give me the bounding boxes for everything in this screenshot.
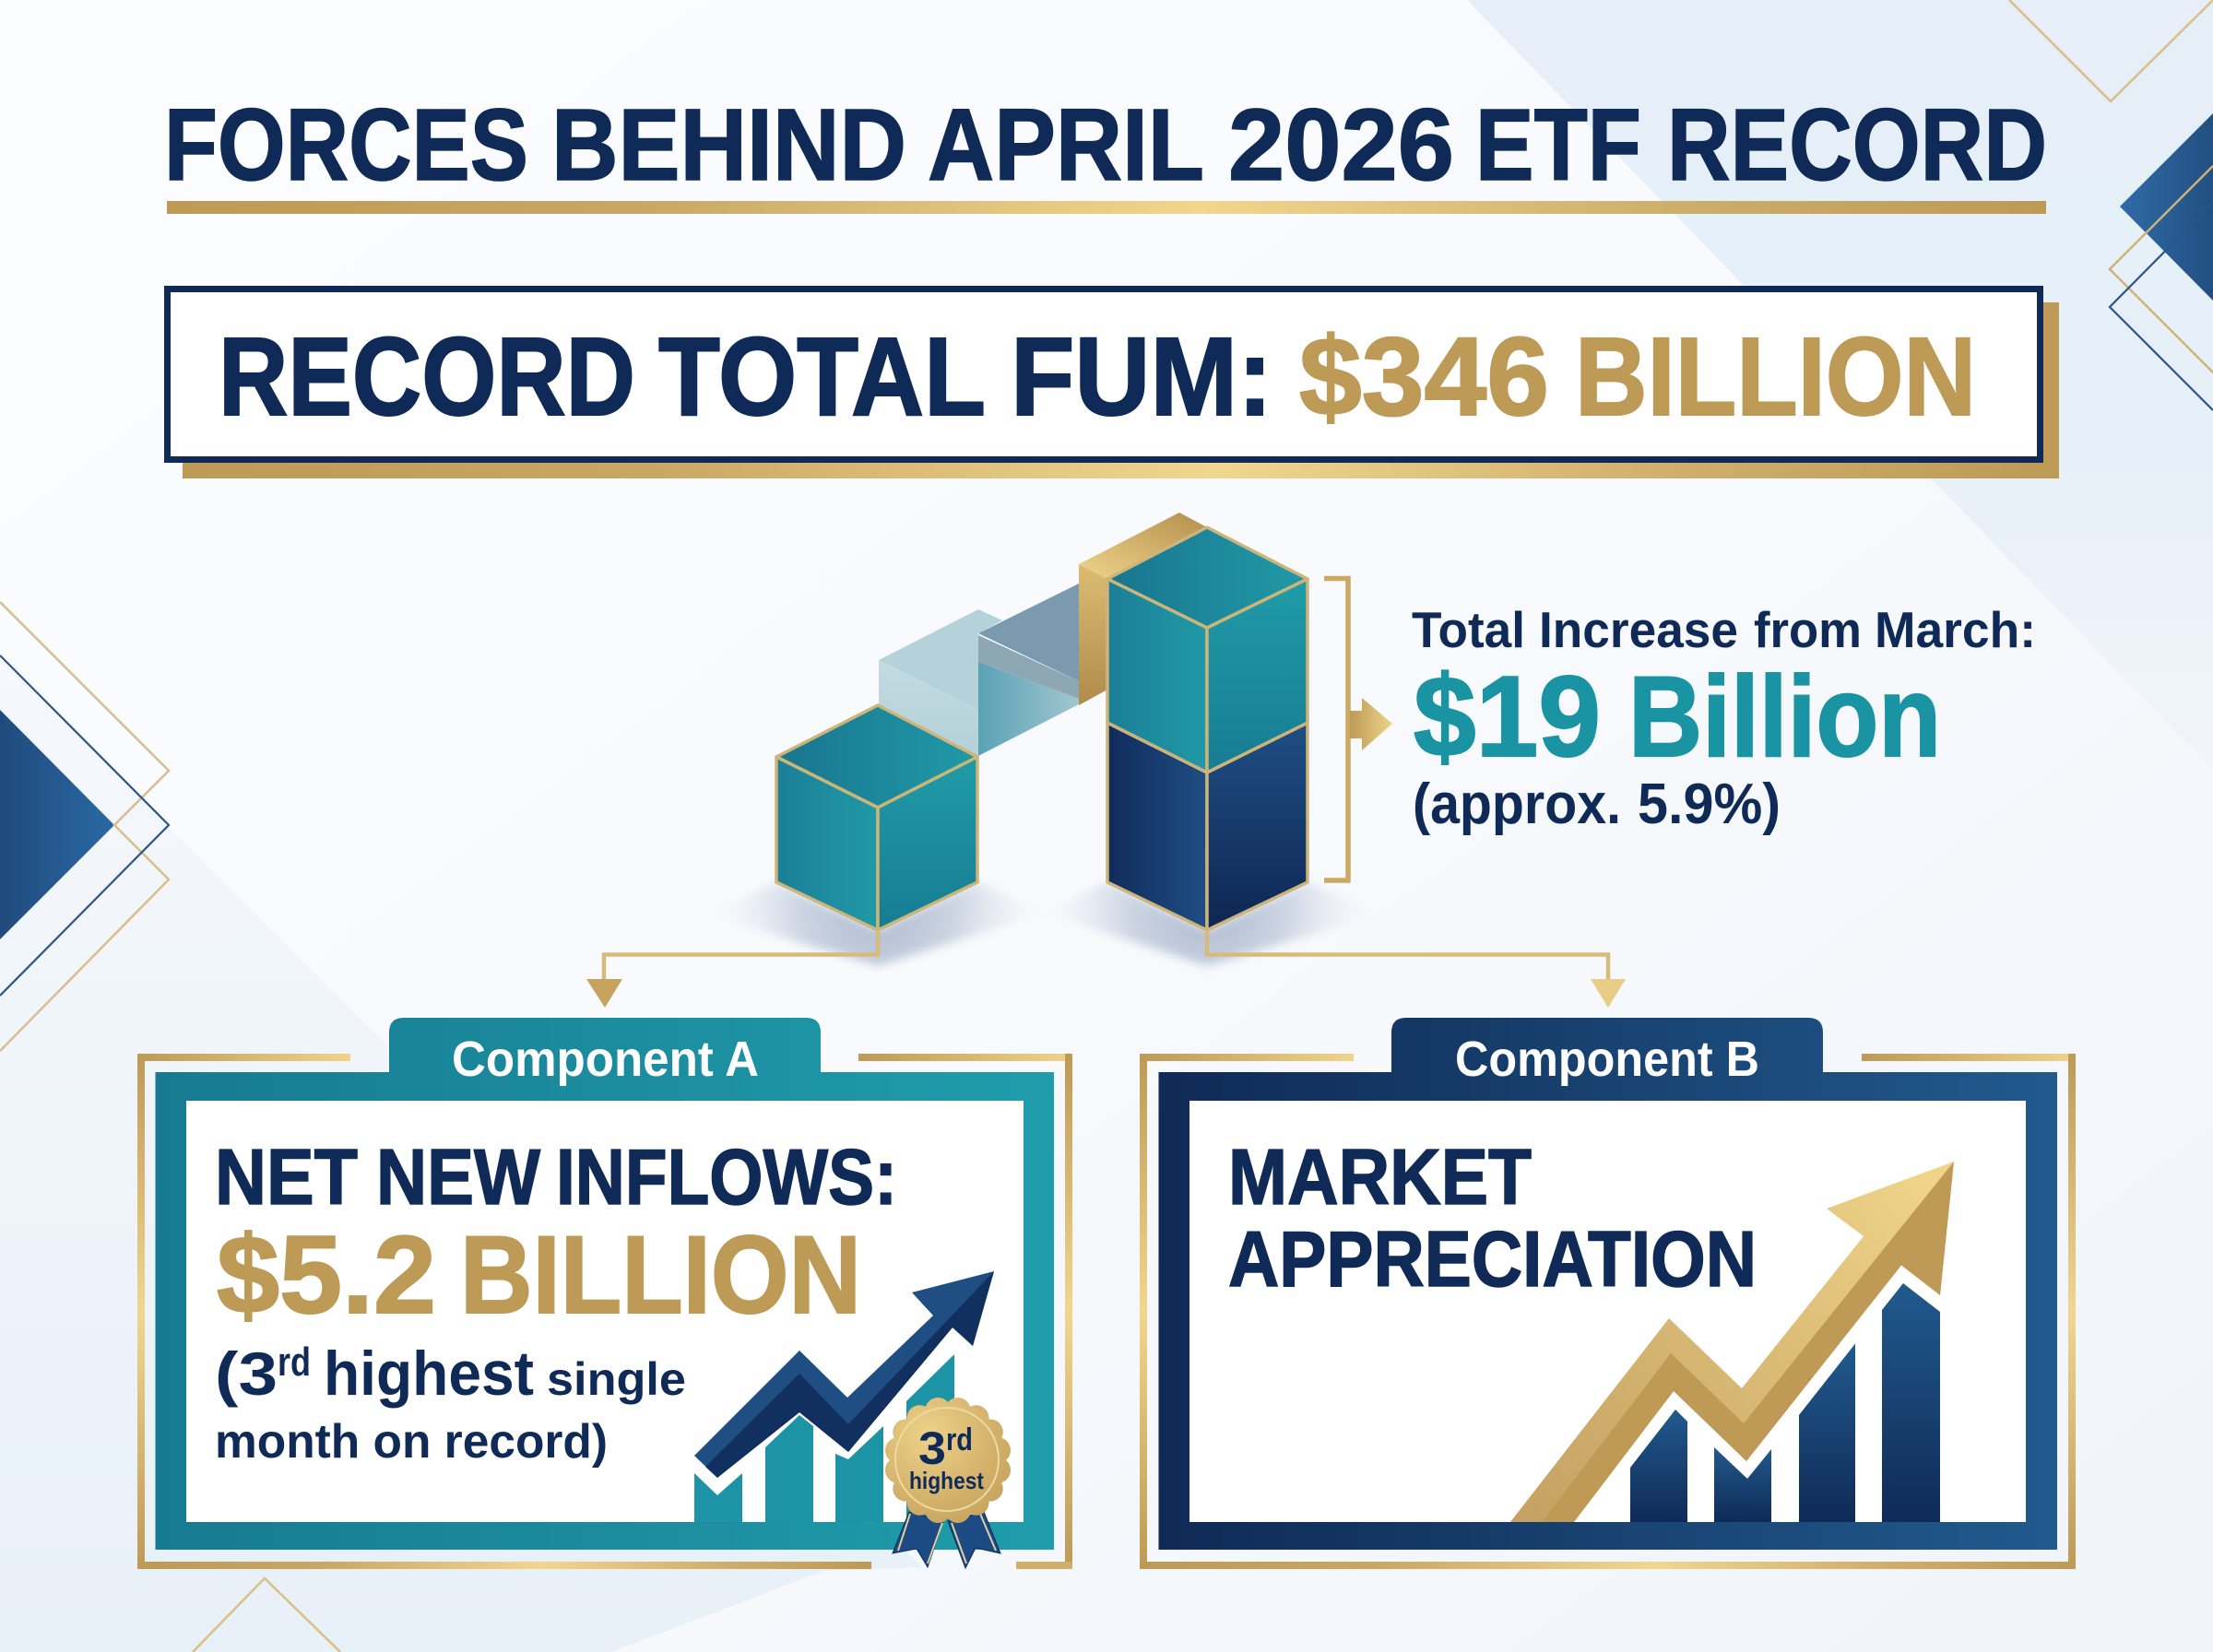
banner text: record total FUM (219, 313, 1272, 439)
note: 3rd highest single month on record: highest (324, 1339, 534, 1409)
banner value: $346 billion: BILLION (1575, 313, 1976, 439)
total increase label: March: (1875, 601, 2036, 658)
note: 3rd highest single month on record: rd (278, 1339, 311, 1385)
tab label A: Component A (452, 1032, 759, 1087)
chart: navy rising arrow (694, 1271, 994, 1478)
heading: appreciation: APPRECIATION (1228, 1216, 1757, 1304)
teal card with tab (155, 1018, 1054, 1550)
ghost connecting blocks (879, 584, 1079, 756)
medal: 3rd highest: 3 (918, 1422, 946, 1474)
chart: teal bars (694, 1354, 954, 1522)
tall stack: teal upper block (1107, 527, 1308, 773)
arrow: bracket to total increase (1350, 698, 1392, 750)
heading: net new inflows: INFLOWS: (556, 1134, 897, 1221)
connector arrow to component B (1207, 930, 1626, 1008)
medal: 3rd highest (885, 1398, 1011, 1523)
total increase value: Billion (1628, 654, 1941, 781)
total increase percent: (approx. (1413, 773, 1621, 836)
heading: net new inflows: NET (215, 1134, 358, 1221)
banner text: record total FUM: RECORD (219, 313, 635, 439)
total increase label (1412, 601, 2036, 658)
title: RECORD (1667, 88, 2047, 202)
title: BEHIND (551, 88, 906, 202)
record banner (168, 289, 2059, 478)
gold slab behind tall stack (1079, 513, 1207, 705)
total increase value: $19 (1414, 654, 1601, 781)
note: 3rd highest single month on record: single (547, 1353, 686, 1405)
white content area A (186, 1101, 1024, 1522)
medal ribbon (893, 1512, 1000, 1568)
value: $5.2 billion: $5.2 (217, 1213, 436, 1337)
decoration: top right chevron (2009, 0, 2213, 101)
decoration: bottom left triangle (193, 1578, 340, 1652)
total increase label: from (1754, 601, 1862, 658)
bracket (1324, 579, 1348, 880)
title: APRIL (928, 88, 1204, 202)
total increase value (1414, 654, 1941, 781)
note: 3rd highest single month on record: month on record) (215, 1415, 608, 1469)
total increase percent (1413, 773, 1781, 836)
total increase label: Increase (1539, 601, 1738, 658)
gold frame B (1140, 1054, 2076, 1569)
decoration: right diamond (2110, 113, 2213, 410)
tall stack: navy lower block (1107, 723, 1308, 930)
white content area B (1189, 1101, 2026, 1522)
banner value: $346 billion: $346 (1299, 313, 1549, 439)
banner value: $346 billion (1299, 313, 1976, 439)
heading: net new inflows (215, 1134, 897, 1221)
medal: 3rd highest: highest (909, 1467, 984, 1494)
heading: market: MARKET (1228, 1134, 1532, 1221)
small teal cube (776, 705, 977, 930)
heading: net new inflows: NEW (376, 1134, 541, 1221)
cube ground shadows (705, 882, 1379, 966)
title: 2026 (1228, 88, 1454, 202)
decoration: left diamond (0, 602, 169, 1051)
panel: component A (137, 1018, 1072, 1569)
tab label B: Component B (1455, 1032, 1759, 1087)
banner text: record total FUM: FUM: (1011, 313, 1272, 439)
banner text: record total FUM: TOTAL (658, 313, 986, 439)
title: ETF (1475, 88, 1641, 202)
value: $5.2 billion (217, 1213, 861, 1337)
title (164, 88, 2047, 202)
title underline (167, 201, 2046, 214)
chart: gold rising arrow (1510, 1162, 1954, 1522)
chart: navy bars (1630, 1283, 1940, 1522)
connector arrow to component A (586, 930, 878, 1008)
gold frame A (137, 1054, 1072, 1569)
note: 3rd highest single month on record (215, 1339, 686, 1469)
panel: component B (1140, 1018, 2076, 1569)
medal: 3rd highest: rd (946, 1422, 973, 1457)
navy card with tab (1158, 1018, 2057, 1550)
title: FORCES (164, 88, 528, 202)
total increase percent: 5.9%) (1638, 773, 1781, 836)
total increase label: Total (1412, 601, 1525, 658)
value: $5.2 billion: BILLION (460, 1213, 861, 1337)
note: 3rd highest single month on record: (3 (215, 1339, 278, 1408)
isometric stacked cube chart (705, 513, 1379, 966)
